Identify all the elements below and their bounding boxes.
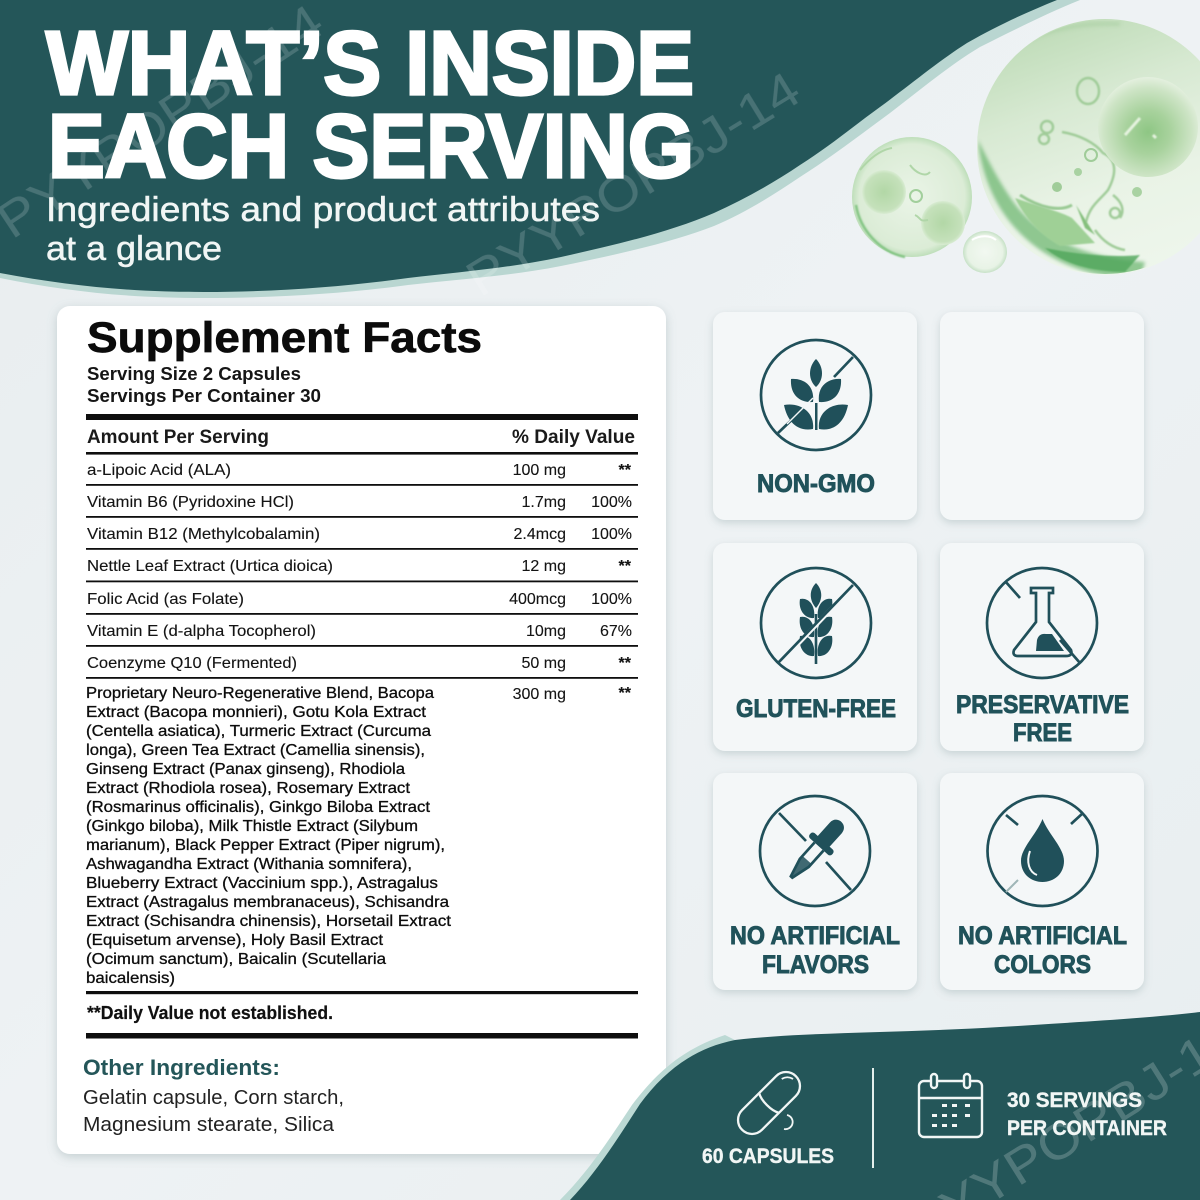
label: 30 servings per container: PER CONTAINER bbox=[1007, 1117, 1167, 1140]
ingredient rows: Folic Acid (as Folate) bbox=[87, 591, 244, 608]
proprietary blend text: Extract (Bacopa monnieri), Gotu Kola Extract bbox=[86, 704, 427, 721]
label: no artificial colors: COLORS bbox=[994, 951, 1091, 979]
tiny bubble bbox=[963, 231, 1007, 273]
proprietary blend text: Proprietary Neuro-Regenerative Blend, Bacopa bbox=[86, 685, 434, 702]
watermark text bbox=[0, 0, 810, 307]
tile: no artificial flavors bbox=[713, 773, 917, 990]
watermark text: PYYPOPBJ-14 bbox=[456, 61, 810, 307]
label: no artificial flavors: NO ARTIFICIAL bbox=[730, 922, 900, 950]
proprietary blend text: marianum), Black Pepper Extract (Piper nigrum), bbox=[86, 837, 445, 854]
proprietary blend text: (Centella asiatica), Turmeric Extract (Curcuma bbox=[86, 723, 431, 740]
serving info bbox=[87, 364, 321, 406]
divider bbox=[872, 1068, 874, 1168]
serving info: Serving Size 2 Capsules bbox=[87, 364, 301, 384]
ingredient rows: ** bbox=[619, 655, 632, 672]
table header: Amount Per Serving bbox=[87, 427, 269, 448]
ingredient rows: Vitamin B6 (Pyridoxine HCl) bbox=[87, 494, 294, 511]
medium bubble bbox=[852, 137, 972, 257]
proprietary blend text: Blueberry Extract (Vaccinium spp.), Astragalus bbox=[86, 875, 438, 892]
label: preservative free: PRESERVATIVE bbox=[956, 691, 1129, 719]
serving info: Servings Per Container 30 bbox=[87, 386, 321, 406]
tile: preservative free bbox=[940, 543, 1144, 751]
label: no artificial colors bbox=[958, 922, 1127, 979]
icon: capsule bbox=[732, 1066, 806, 1140]
subtitle bbox=[46, 191, 600, 268]
ingredient rows: 400mcg bbox=[509, 591, 566, 608]
icon: crossed dropper bbox=[760, 796, 870, 906]
label: 60 capsules: 60 CAPSULES bbox=[702, 1145, 834, 1168]
proprietary blend text: Ashwagandha Extract (Withania somnifera), bbox=[86, 856, 412, 873]
other ingredients text: Magnesium stearate, Silica bbox=[83, 1113, 335, 1136]
ingredient rows: Vitamin B12 (Methylcobalamin) bbox=[87, 526, 320, 543]
inner bubble bbox=[1098, 77, 1198, 177]
bubbles illustration bbox=[852, 19, 1200, 280]
icon: crossed flask bbox=[987, 568, 1097, 678]
proprietary blend text bbox=[86, 685, 452, 987]
tile: no artificial colors bbox=[940, 773, 1144, 990]
label: no artificial colors: NO ARTIFICIAL bbox=[958, 922, 1127, 950]
proprietary blend text: (Equisetum arvense), Holy Basil Extract bbox=[86, 932, 384, 949]
ingredient rows: ** bbox=[619, 558, 632, 575]
ingredient rows: 67% bbox=[600, 623, 632, 640]
table header bbox=[87, 427, 635, 448]
ingredient rows: 100 mg bbox=[513, 462, 566, 479]
proprietary blend text: (Ocimum sanctum), Baicalin (Scutellaria bbox=[86, 951, 386, 968]
label: 30 servings per container: 30 SERVINGS bbox=[1007, 1089, 1142, 1112]
label: preservative free bbox=[956, 691, 1129, 747]
panel: supplement facts bbox=[57, 306, 666, 1154]
ingredient rows: 100% bbox=[591, 591, 632, 608]
label: preservative free: FREE bbox=[1013, 719, 1072, 747]
proprietary blend text: Ginseng Extract (Panax ginseng), Rhodiola bbox=[86, 761, 405, 778]
daily value note: **Daily Value not established. bbox=[87, 1003, 333, 1023]
label: no artificial flavors: FLAVORS bbox=[762, 951, 869, 979]
ingredient rows: 2.4mcg bbox=[514, 526, 566, 543]
ingredient rows: 1.7mg bbox=[522, 494, 566, 511]
heading: supplement facts: Supplement Facts bbox=[87, 314, 482, 362]
icon: calendar bbox=[919, 1074, 982, 1137]
ingredient rows: ** bbox=[619, 685, 632, 702]
label: no artificial flavors bbox=[730, 922, 900, 979]
ingredient rows: 50 mg bbox=[522, 655, 566, 672]
header banner bbox=[0, 0, 1080, 298]
ingredient rows: Vitamin E (d-alpha Tocopherol) bbox=[87, 623, 316, 640]
proprietary blend text: baicalensis) bbox=[86, 970, 175, 987]
icon: crossed drop bbox=[988, 796, 1098, 906]
icon: crossed leaf bbox=[761, 340, 871, 450]
ingredient rows: 100% bbox=[591, 494, 632, 511]
ingredient rows: a-Lipoic Acid (ALA) bbox=[87, 462, 231, 479]
title: WHAT’S INSIDE bbox=[46, 14, 694, 114]
proprietary blend text: Extract (Rhodiola rosea), Rosemary Extract bbox=[86, 780, 411, 797]
subtitle: at a glance bbox=[46, 230, 222, 268]
title: EACH SERVING bbox=[48, 97, 694, 197]
title bbox=[46, 14, 694, 197]
proprietary blend text: (Ginkgo biloba), Milk Thistle Extract (Silybum bbox=[86, 818, 418, 835]
proprietary blend text: (Rosmarinus officinalis), Ginkgo Biloba Extract bbox=[86, 799, 431, 816]
large bubble bbox=[977, 19, 1200, 280]
tile: gluten-free bbox=[713, 543, 917, 751]
table rules bbox=[86, 414, 638, 1038]
other ingredients text bbox=[83, 1086, 344, 1136]
subtitle: Ingredients and product attributes bbox=[46, 191, 600, 229]
proprietary blend text: Extract (Astragalus membranaceus), Schisandra bbox=[86, 894, 449, 911]
bottom banner bbox=[560, 1012, 1200, 1200]
ingredient rows: Nettle Leaf Extract (Urtica dioica) bbox=[87, 558, 333, 575]
ingredient rows: 10mg bbox=[526, 623, 566, 640]
table header: % Daily Value bbox=[512, 427, 635, 448]
ingredient rows: Coenzyme Q10 (Fermented) bbox=[87, 655, 297, 672]
label: non-gmo: NON-GMO bbox=[757, 470, 875, 498]
ingredient rows bbox=[87, 462, 632, 703]
icon: crossed wheat bbox=[761, 568, 871, 678]
proprietary blend text: Extract (Schisandra chinensis), Horsetail Extract bbox=[86, 913, 452, 930]
other ingredients text: Gelatin capsule, Corn starch, bbox=[83, 1086, 344, 1109]
ingredient rows: ** bbox=[619, 462, 632, 479]
ingredient rows: 100% bbox=[591, 526, 632, 543]
label: gluten-free: GLUTEN-FREE bbox=[736, 695, 896, 723]
ingredient rows: 300 mg bbox=[513, 686, 566, 703]
other ingredients heading: Other Ingredients: bbox=[83, 1055, 280, 1080]
tile: non-gmo bbox=[713, 312, 917, 520]
proprietary blend text: longa), Green Tea Extract (Camellia sinensis), bbox=[86, 742, 425, 759]
ingredient rows: 12 mg bbox=[522, 558, 566, 575]
label: 30 servings per container bbox=[1007, 1089, 1167, 1140]
tile: empty bbox=[940, 312, 1144, 520]
